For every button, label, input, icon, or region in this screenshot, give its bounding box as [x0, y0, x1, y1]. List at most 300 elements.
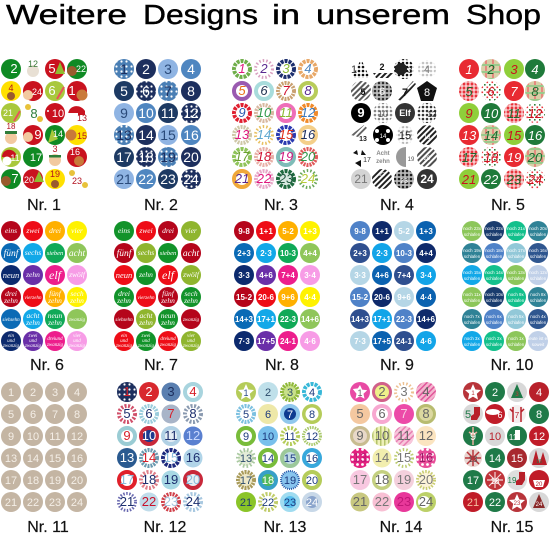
- panel: Nr. 15 Christmas red green grey: 21: [467, 497, 479, 509]
- panel: Nr. 6 rainbow number words: vier: [73, 334, 81, 339]
- panel: Nr. 7 red and green number words: und: [187, 339, 195, 344]
- panel: Nr. 8 rainbow sums: 2·3: [260, 249, 272, 258]
- panel: Nr. 15 Christmas red green grey: 7: [515, 411, 520, 420]
- panel: Nr. 9 blue sums: 9+6: [397, 293, 411, 302]
- panel: Nr. 7 red and green number words: siebzehn: [115, 318, 133, 323]
- panel: Nr. 9 blue sums: 3·4: [420, 271, 432, 280]
- panel: Nr. 10 countdown "noch schlafen": schlafen: [464, 276, 481, 281]
- panel: Nr. 3 colourful rings: 21: [234, 171, 249, 186]
- panel: Nr. 13 green and blue: 5: [243, 409, 249, 421]
- panel: Nr. 10 countdown "noch schlafen": schlafen: [508, 342, 525, 347]
- panel: Nr. 10 countdown "noch schlafen": noch 20x: [529, 226, 548, 231]
- panel: Nr. 3 colourful rings: 4: [304, 61, 312, 76]
- panel: Nr. 6 rainbow number words: zehn: [69, 296, 84, 305]
- panel: Nr. 6 rainbow number words: fünf: [4, 248, 20, 259]
- panel: Nr. 3 colourful rings: 15: [279, 127, 294, 142]
- panel: Nr. 1 Christmas characters: 17: [30, 152, 42, 164]
- panel: Nr. 10 countdown "noch schlafen": noch 1x: [508, 336, 524, 341]
- panel: Nr. 7 red and green number words: ein: [121, 334, 128, 339]
- panel: Nr. 2 blue numbers: 8: [187, 83, 195, 99]
- panel: Nr. 1 Christmas characters: 7: [11, 171, 19, 186]
- panel: Nr. 14 pink and olive: 1: [357, 388, 363, 398]
- panel: Nr. 3 colourful rings: 7: [282, 83, 290, 98]
- panel: Nr. 14 pink and olive: 9: [356, 428, 364, 443]
- panel: Nr. 14 pink and olive: 19: [397, 472, 411, 487]
- panel: Nr. 6 rainbow number words: siebzehn: [2, 318, 20, 323]
- panel: Nr. 8 rainbow sums: 3·3: [238, 271, 250, 280]
- panel: Nr. 11 kraft paper numbers: 12: [71, 431, 83, 443]
- panel: Nr. 2 blue numbers: 18: [138, 149, 154, 165]
- panel: Nr. 10 countdown "noch schlafen": heute ist es: [527, 336, 550, 341]
- panel: Nr. 9 blue sums: 14+3: [351, 315, 370, 324]
- panel: Nr. 8 rainbow sums: 17+5: [257, 337, 276, 346]
- panel: Nr. 7 red and green number words: sechs: [138, 248, 154, 257]
- panel: Nr. 9 blue sums: 24-1: [396, 337, 413, 346]
- panel: Nr. 2 blue numbers: 9: [120, 105, 128, 121]
- panel: Nr. 10 countdown "noch schlafen": schlafen: [464, 298, 481, 303]
- panel: Nr. 8 rainbow sums: 15-2: [236, 293, 253, 302]
- panel: Nr. 4 black and white: 9: [357, 105, 365, 120]
- panel: Nr. 8 rainbow sums: [234, 221, 320, 351]
- panel: Nr. 7 red and green number words: zwei: [138, 226, 153, 235]
- panel: Nr. 6 rainbow number words: zwanzig: [68, 344, 86, 349]
- panel: Nr. 5 red and green plaid: 3: [510, 62, 518, 77]
- panel: Nr. 13 green and blue: 18: [262, 475, 274, 487]
- panel: Nr. 4 black and white: 10: [378, 109, 388, 119]
- panel: Nr. 6 rainbow number words: ein: [8, 334, 15, 339]
- panel: Nr. 7 red and green number words: vierzehn: [138, 296, 155, 301]
- panel: Nr. 4 black and white: 22: [379, 172, 385, 178]
- panel: Nr. 11 kraft paper numbers: [1, 382, 87, 512]
- panel: Nr. 4 black and white: 21: [354, 172, 368, 186]
- panel: Nr. 12 red white and blue: [117, 382, 202, 512]
- panel: Nr. 13 green and blue: 22: [262, 497, 274, 509]
- panel: Nr. 6 rainbow number words: zwanzig: [68, 318, 86, 323]
- panel: Nr. 12 red white and blue: 5: [123, 406, 131, 421]
- panel: Nr. 6 rainbow number words: und: [7, 339, 15, 344]
- panel: Nr. 10 countdown "noch schlafen": schlafen: [486, 276, 503, 281]
- panel: Nr. 14 pink and olive: 20: [419, 472, 433, 487]
- panel: Nr. 7 red and green number words: dreiund: [160, 337, 176, 342]
- panel: Nr. 4 black and white: 19: [408, 157, 415, 163]
- panel: Nr. 2 blue numbers: 6: [142, 83, 150, 99]
- panel: Nr. 4 black and white: 8: [424, 87, 430, 99]
- panel: Nr. 3 colourful rings: 11: [279, 105, 293, 120]
- panel: Nr. 8 rainbow sums: 22-3: [280, 315, 297, 324]
- panel: Nr. 9 blue sums: 22-3: [396, 315, 413, 324]
- panel: Nr. 5 red and green plaid: 17: [462, 150, 477, 165]
- panel: Nr. 3 colourful rings: 10: [257, 105, 272, 120]
- panel: Nr. 12 red white and blue: 23: [164, 494, 178, 509]
- panel: Nr. 9 blue sums: 4+4: [419, 249, 433, 258]
- caption: Nr. 10: Nr. 10: [491, 357, 533, 374]
- panel: Nr. 3 colourful rings: 23: [278, 171, 294, 186]
- panel: Nr. 9 blue sums: 1+1: [375, 227, 389, 236]
- panel: Nr. 3 colourful rings: 12: [301, 105, 316, 120]
- panel: Nr. 4 black and white: [351, 59, 437, 189]
- panel: Nr. 2 blue numbers: [114, 59, 201, 189]
- panel: Nr. 10 countdown "noch schlafen": noch 3x: [464, 336, 480, 341]
- panel: Nr. 2 blue numbers: 17: [116, 149, 132, 165]
- panel: Nr. 4 black and white: zehn: [376, 159, 390, 165]
- panel: Nr. 12 red white and blue: 22: [142, 494, 156, 509]
- panel: Nr. 7 red and green number words: und: [120, 339, 128, 344]
- panel: Nr. 4 black and white: 1: [351, 64, 357, 76]
- panel: Nr. 11 kraft paper numbers: 22: [27, 497, 39, 509]
- panel: Nr. 11 kraft paper numbers: 14: [27, 453, 39, 465]
- panel: Nr. 10 countdown "noch schlafen": schlafen: [530, 254, 547, 259]
- panel: Nr. 15 Christmas red green grey: 2: [492, 387, 498, 399]
- panel: Nr. 2 blue numbers: 24: [183, 171, 199, 187]
- panel: Nr. 9 blue sums: 2·3: [376, 249, 388, 258]
- panel: Nr. 13 green and blue: 2: [265, 387, 271, 399]
- panel: Nr. 1 Christmas characters: 9: [34, 127, 42, 142]
- panel: Nr. 1 Christmas characters: 24: [32, 87, 42, 97]
- panel: Nr. 11 kraft paper numbers: 8: [74, 409, 80, 421]
- panel: Nr. 10 countdown "noch schlafen": schlafen: [486, 232, 503, 237]
- panel: Nr. 8 rainbow sums: 14+3: [235, 315, 254, 324]
- panel: Nr. 6 rainbow number words: zwei: [25, 226, 40, 235]
- panel: Nr. 12 red white and blue: 10: [142, 428, 156, 443]
- panel: Nr. 6 rainbow number words: fünf: [49, 289, 62, 298]
- panel: Nr. 6 rainbow number words: zwanzig: [46, 343, 64, 348]
- panel: Nr. 8 rainbow sums: 5-2: [282, 227, 294, 236]
- panel: Nr. 4 black and white: 5: [360, 87, 366, 97]
- panel: Nr. 5 red and green plaid: 11: [507, 106, 521, 121]
- panel: Nr. 14 pink and olive: 12: [419, 428, 433, 443]
- panel: Nr. 15 Christmas red green grey: 8: [536, 409, 542, 421]
- panel: Nr. 7 red and green number words: fünf: [117, 248, 133, 259]
- panel: Nr. 14 pink and olive: 8: [422, 406, 430, 421]
- panel: Nr. 15 Christmas red green grey: 4: [536, 387, 542, 399]
- panel: Nr. 11 kraft paper numbers: 9: [8, 431, 14, 443]
- panel: Nr. 2 blue numbers: 23: [160, 171, 176, 187]
- panel: Nr. 1 Christmas characters: 4: [8, 83, 14, 93]
- panel: Nr. 4 black and white: 6: [379, 86, 385, 98]
- panel: Nr. 10 countdown "noch schlafen": schlafen: [464, 232, 481, 237]
- panel: Nr. 7 red and green number words: zehn: [160, 296, 175, 305]
- panel: Nr. 4 black and white: 3: [407, 65, 413, 75]
- panel: Nr. 7 red and green number words: neun: [116, 270, 132, 280]
- panel: Nr. 10 countdown "noch schlafen": noch 22x: [485, 226, 504, 231]
- panel: Nr. 10 countdown "noch schlafen": noch 6x: [486, 314, 502, 319]
- panel: Nr. 12 red white and blue: 2: [145, 384, 153, 399]
- panel: Nr. 10 countdown "noch schlafen": schlafen: [464, 254, 481, 259]
- panel: Nr. 3 colourful rings: 8: [304, 83, 312, 98]
- caption: Nr. 9: Nr. 9: [380, 357, 414, 374]
- panel: Nr. 1 Christmas characters: 10: [52, 108, 64, 120]
- panel: Nr. 15 Christmas red green grey: 3: [515, 392, 519, 398]
- panel: Nr. 11 kraft paper numbers: 20: [71, 475, 83, 487]
- panel: Nr. 8 rainbow sums: 14+6: [301, 315, 320, 324]
- panel: Nr. 9 blue sums: 1+3: [419, 227, 433, 236]
- panel: Nr. 1 Christmas characters: 16: [70, 147, 80, 157]
- panel: Nr. 2 blue numbers: 7: [164, 83, 172, 99]
- panel: Nr. 5 red and green plaid: 5: [465, 84, 473, 99]
- title: [6, 0, 541, 30]
- panel: Nr. 5 red and green plaid: 1: [465, 62, 473, 77]
- panel: Nr. 3 colourful rings: 19: [279, 149, 293, 164]
- panel: Nr. 9 blue sums: 20-6: [374, 293, 391, 302]
- panel: Nr. 1 Christmas characters: 14: [53, 129, 63, 139]
- panel: Nr. 13 green and blue: 3: [287, 387, 293, 399]
- panel: Nr. 1 Christmas characters: 6: [48, 83, 56, 98]
- panel: Nr. 12 red white and blue: 20: [186, 472, 200, 487]
- panel: Nr. 7 red and green number words: drei: [162, 226, 174, 235]
- panel: Nr. 8 rainbow sums: 2+3: [237, 249, 251, 258]
- panel: Nr. 7 red and green number words: acht: [183, 249, 200, 259]
- panel: Nr. 10 countdown "noch schlafen": schlafen: [486, 298, 503, 303]
- panel: Nr. 2 blue numbers: 4: [187, 61, 195, 77]
- panel: Nr. 15 Christmas red green grey: 5: [465, 409, 471, 421]
- panel: Nr. 6 rainbow number words: zehn: [47, 318, 62, 327]
- panel: Nr. 12 red white and blue: 14: [142, 450, 156, 465]
- panel: Nr. 4 black and white: 20: [424, 156, 431, 162]
- panel: Nr. 4 black and white: 7: [402, 87, 408, 99]
- panel: Nr. 7 red and green number words: [114, 221, 201, 351]
- panel: Nr. 6 rainbow number words: zwölf: [68, 270, 86, 279]
- panel: Nr. 4 black and white: 24: [420, 172, 434, 186]
- panel: Nr. 4 black and white: 14: [380, 134, 387, 140]
- panel: Nr. 4 black and white: Acht: [376, 151, 390, 157]
- panel: Nr. 5 red and green plaid: 7: [510, 84, 518, 99]
- panel: Nr. 1 Christmas characters: 11: [10, 153, 20, 163]
- panel: Nr. 6 rainbow number words: drei: [49, 226, 61, 235]
- panel: Nr. 3 colourful rings: 17: [235, 149, 250, 164]
- panel: Nr. 13 green and blue: 17: [240, 475, 252, 487]
- panel: Nr. 10 countdown "noch schlafen": noch 18x: [485, 248, 504, 253]
- panel: Nr. 10 countdown "noch schlafen": schlafen: [530, 232, 547, 237]
- panel: Nr. 8 rainbow sums: 17+1: [257, 315, 276, 324]
- panel: Nr. 8 rainbow sums: 3·4: [304, 271, 316, 280]
- panel: Nr. 13 green and blue: 9: [243, 431, 249, 443]
- panel: Nr. 13 green and blue: 4: [309, 387, 315, 399]
- panel: Nr. 1 Christmas characters: 12: [28, 59, 38, 69]
- panel: Nr. 12 red white and blue: 17: [120, 472, 134, 487]
- panel: Nr. 11 kraft paper numbers: 11: [49, 431, 61, 443]
- panel: Nr. 12 red white and blue: 12: [186, 428, 200, 443]
- panel: Nr. 12 red white and blue: 13: [120, 450, 134, 465]
- panel: Nr. 13 green and blue: 14: [262, 453, 274, 465]
- panel: Nr. 15 Christmas red green grey: 13: [469, 455, 478, 464]
- panel: Nr. 8 rainbow sums: 9-8: [238, 227, 250, 236]
- panel: Nr. 10 countdown "noch schlafen": [462, 221, 550, 351]
- panel: Nr. 3 colourful rings: 13: [235, 127, 250, 142]
- panel: Nr. 5 red and green plaid: 8: [531, 84, 539, 99]
- panel: Nr. 10 countdown "noch schlafen": schlafen: [530, 298, 547, 303]
- panel: Nr. 15 Christmas red green grey: 19: [508, 476, 517, 485]
- panel: Nr. 8 rainbow sums: 4·6: [304, 337, 316, 346]
- panel: Nr. 10 countdown "noch schlafen": noch 4x: [530, 314, 546, 319]
- panel: Nr. 6 rainbow number words: [1, 221, 87, 351]
- panel: Nr. 7 red and green number words: zwanzig: [182, 318, 200, 323]
- panel: Nr. 8 rainbow sums: 24-1: [280, 337, 297, 346]
- panel: Nr. 10 countdown "noch schlafen": noch 21x: [507, 226, 526, 231]
- panel: Nr. 2 blue numbers: 22: [138, 171, 154, 187]
- panel: Nr. 3 colourful rings: 1: [238, 61, 246, 76]
- caption: Nr. 8: Nr. 8: [265, 357, 299, 374]
- panel: Nr. 7 red and green number words: elf: [162, 268, 176, 282]
- panel: Nr. 1 Christmas characters: [1, 59, 88, 189]
- panel: Nr. 10 countdown "noch schlafen": noch 10x: [485, 292, 504, 297]
- panel: Nr. 14 pink and olive: 23: [397, 494, 411, 509]
- panel: Nr. 10 countdown "noch schlafen": noch 8x: [530, 292, 546, 297]
- panel: Nr. 14 pink and olive: 4: [422, 384, 430, 399]
- panel: Nr. 9 blue sums: 14+6: [417, 315, 436, 324]
- panel: Nr. 14 pink and olive: 3: [400, 384, 408, 399]
- panel: Nr. 8 rainbow sums: 1+3: [303, 227, 317, 236]
- panel: Nr. 8 rainbow sums: 10-3: [280, 249, 297, 258]
- panel: Nr. 12 red white and blue: 6: [145, 406, 153, 421]
- panel: Nr. 5 red and green plaid: 13: [462, 128, 477, 143]
- panel: Nr. 7 red and green number words: zwölf: [182, 270, 200, 279]
- panel: Nr. 10 countdown "noch schlafen": noch 17x: [507, 248, 526, 253]
- panel: Nr. 2 blue numbers: 1: [120, 61, 128, 77]
- panel: Nr. 5 red and green plaid: 18: [484, 150, 499, 165]
- panel: Nr. 10 countdown "noch schlafen": schlafen: [508, 276, 525, 281]
- panel: Nr. 9 blue sums: 5-2: [398, 227, 410, 236]
- panel: Nr. 1 Christmas characters: 5: [48, 61, 56, 76]
- panel: Nr. 11 kraft paper numbers: 13: [5, 453, 17, 465]
- panel: Nr. 14 pink and olive: 24: [419, 494, 433, 509]
- panel: Nr. 4 black and white: 17: [363, 157, 371, 164]
- panel: Nr. 10 countdown "noch schlafen": noch 16x: [529, 248, 548, 253]
- panel: Nr. 3 colourful rings: 24: [300, 171, 315, 186]
- panel: Nr. 11 kraft paper numbers: 24: [71, 497, 83, 509]
- panel: Nr. 12 red white and blue: 21: [120, 494, 134, 509]
- panel: Nr. 15 Christmas red green grey: 12: [533, 431, 545, 443]
- panel: Nr. 6 rainbow number words: zehn: [25, 270, 40, 279]
- panel: Nr. 2 blue numbers: 13: [116, 127, 132, 143]
- panel: Nr. 5 red and green plaid: 21: [461, 172, 476, 187]
- panel: Nr. 14 pink and olive: 18: [375, 472, 389, 487]
- panel: Nr. 5 red and green plaid: 2: [486, 62, 495, 77]
- panel: Nr. 11 kraft paper numbers: 18: [27, 475, 39, 487]
- panel: Nr. 15 Christmas red green grey: 1: [471, 391, 475, 397]
- panel: Nr. 8 rainbow sums: 4+4: [303, 249, 317, 258]
- panel: Nr. 13 green and blue: 1: [243, 388, 249, 398]
- panel: Nr. 10 countdown "noch schlafen": noch 23x: [463, 226, 482, 231]
- panel: Nr. 9 blue sums: 17+5: [373, 337, 392, 346]
- panel: Nr. 9 blue sums: 7·3: [354, 337, 366, 346]
- panel: Nr. 3 colourful rings: 2: [259, 61, 268, 76]
- panel: Nr. 15 Christmas red green grey: 10: [489, 431, 501, 443]
- panel: Nr. 3 colourful rings: 5: [238, 83, 246, 98]
- panel: Nr. 6 rainbow number words: neun: [48, 311, 63, 320]
- panel: Nr. 4 black and white: 16: [424, 135, 431, 141]
- panel: Nr. 11 kraft paper numbers: 19: [49, 475, 61, 487]
- panel: Nr. 15 Christmas red green grey: 23: [514, 501, 521, 507]
- panel: Nr. 3 colourful rings: [234, 60, 316, 188]
- panel: Nr. 15 Christmas red green grey: 17: [467, 475, 479, 487]
- panel: Nr. 1 Christmas characters: 3: [52, 144, 58, 154]
- panel: Nr. 9 blue sums: 7+4: [397, 271, 411, 280]
- caption: Nr. 3: Nr. 3: [264, 197, 298, 214]
- panel: Nr. 9 blue sums: [350, 221, 436, 351]
- panel: Nr. 10 countdown "noch schlafen": schlafen: [486, 342, 503, 347]
- panel: Nr. 7 red and green number words: zwanzig: [137, 344, 155, 349]
- caption: Nr. 7: Nr. 7: [144, 357, 178, 374]
- panel: Nr. 5 red and green plaid: 4: [531, 62, 539, 77]
- panel: Nr. 12 red white and blue: 9: [123, 428, 131, 443]
- panel: Nr. 14 pink and olive: [350, 382, 436, 512]
- panel: Nr. 5 red and green plaid: 19: [507, 150, 521, 165]
- panel: Nr. 1 Christmas characters: 1: [68, 83, 76, 98]
- panel: Nr. 13 green and blue: 8: [309, 409, 315, 421]
- panel: Nr. 2 blue numbers: 20: [183, 149, 199, 165]
- panel: Nr. 10 countdown "noch schlafen": schlafen: [464, 320, 481, 325]
- panel: Nr. 10 countdown "noch schlafen": schlafen: [508, 232, 525, 237]
- panel: Nr. 15 Christmas red green grey: 6: [497, 410, 503, 420]
- panel: Nr. 7 red and green number words: fünf: [162, 289, 175, 298]
- panel: Nr. 10 countdown "noch schlafen": schlafen: [486, 320, 503, 325]
- panel: Nr. 4 black and white: 4: [424, 64, 430, 76]
- panel: Nr. 14 pink and olive: 16: [419, 450, 433, 465]
- panel: Nr. 15 Christmas red green grey: 20: [536, 482, 543, 488]
- panel: Nr. 2 blue numbers: 11: [161, 105, 175, 121]
- panel: Nr. 8 rainbow sums: 9+6: [281, 293, 295, 302]
- panel: Nr. 11 kraft paper numbers: 3: [52, 387, 58, 399]
- panel: Nr. 11 kraft paper numbers: 7: [52, 409, 58, 421]
- panel: Nr. 6 rainbow number words: vier: [71, 226, 83, 235]
- panel: Nr. 6 rainbow number words: drei: [5, 289, 17, 298]
- panel: Nr. 8 rainbow sums: 7·3: [238, 337, 250, 346]
- panel: Nr. 6 rainbow number words: zehn: [3, 296, 18, 305]
- panel: Nr. 7 red and green number words: und: [142, 339, 150, 344]
- panel: Nr. 10 countdown "noch schlafen": noch 7x: [464, 314, 480, 319]
- panel: Nr. 2 blue numbers: 2: [142, 61, 150, 77]
- panel: Nr. 9 blue sums: 4·4: [420, 293, 432, 302]
- panel: Nr. 1 Christmas characters: 23: [72, 176, 82, 186]
- panel: Nr. 10 countdown "noch schlafen": noch 12x: [529, 270, 548, 275]
- panel: Nr. 13 green and blue: 12: [306, 431, 318, 443]
- panel: Nr. 4 black and white: 13: [359, 136, 367, 143]
- panel: Nr. 10 countdown "noch schlafen": noch 9x: [508, 292, 524, 297]
- panel: Nr. 5 red and green plaid: 15: [507, 128, 522, 143]
- panel: Nr. 4 black and white: 15: [399, 130, 411, 142]
- panel: Nr. 13 green and blue: 10: [262, 431, 274, 443]
- panel: Nr. 9 blue sums: 15-2: [352, 293, 369, 302]
- panel: Nr. 2 blue numbers: 12: [183, 105, 199, 121]
- panel: Nr. 12 red white and blue: 16: [186, 450, 200, 465]
- panel: Nr. 6 rainbow number words: dreiund: [47, 337, 63, 342]
- panel: Nr. 10 countdown "noch schlafen": noch 14x: [485, 270, 504, 275]
- panel: Nr. 3 colourful rings: 20: [300, 149, 316, 164]
- panel: Nr. 5 red and green plaid: 10: [484, 106, 499, 121]
- panel: Nr. 10 countdown "noch schlafen": noch 15x: [463, 270, 482, 275]
- panel: Nr. 7 red and green number words: drei: [118, 289, 130, 298]
- panel: Nr. 11 kraft paper numbers: 21: [5, 497, 17, 509]
- panel: Nr. 6 rainbow number words: und: [29, 339, 37, 344]
- panel: Nr. 13 green and blue: 21: [240, 497, 252, 509]
- panel: Nr. 1 Christmas characters: 20: [24, 175, 34, 185]
- panel: Nr. 13 green and blue: 13: [240, 453, 252, 465]
- panel: Nr. 6 rainbow number words: sechs: [25, 248, 41, 257]
- panel: Nr. 2 blue numbers: 16: [183, 127, 199, 143]
- panel: Nr. 2 blue numbers: 14: [138, 127, 154, 143]
- panel: Nr. 11 kraft paper numbers: 16: [71, 453, 83, 465]
- panel: Nr. 7 red and green number words: zehn: [160, 318, 175, 327]
- panel: Nr. 8 rainbow sums: 4+6: [259, 271, 273, 280]
- panel: Nr. 7 red and green number words: sieben: [160, 250, 176, 257]
- panel: Nr. 13 green and blue: 20: [306, 475, 318, 487]
- panel: Nr. 14 pink and olive: 2: [378, 384, 386, 399]
- panel: Nr. 1 Christmas characters: 21: [3, 108, 13, 118]
- panel: Nr. 13 green and blue: 7: [287, 409, 293, 421]
- panel: Nr. 2 blue numbers: 15: [160, 127, 176, 143]
- panel: Nr. 8 rainbow sums: 4·4: [304, 293, 316, 302]
- panel: Nr. 5 red and green plaid: 14: [484, 128, 498, 143]
